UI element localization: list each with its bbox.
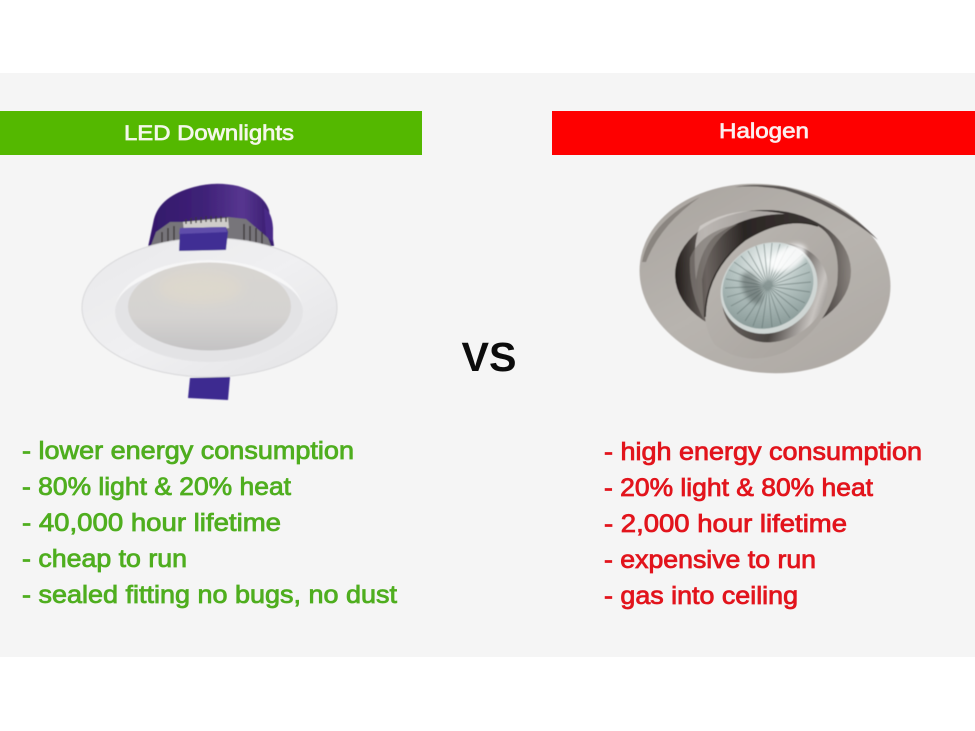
tilted ring bbox=[705, 223, 838, 359]
list: Halogen drawbacks: - 2,000 hour lifetime bbox=[604, 510, 847, 538]
list: LED benefits: - cheap to run bbox=[22, 545, 187, 573]
dark opening bbox=[673, 207, 853, 339]
list: LED benefits: - 40,000 hour lifetime bbox=[22, 509, 281, 537]
lens bbox=[128, 262, 291, 350]
header: LED Downlights: LED Downlights bbox=[124, 122, 294, 145]
list: LED benefits: - 80% light & 20% heat bbox=[22, 473, 291, 501]
clip top bbox=[179, 227, 228, 251]
list: LED benefits: - sealed fitting no bugs, no dust bbox=[22, 581, 397, 609]
header: Halogen: Halogen bbox=[719, 120, 809, 143]
list: Halogen drawbacks: - high energy consumption bbox=[604, 438, 922, 466]
steel flange bbox=[627, 168, 903, 389]
flange bbox=[82, 238, 337, 377]
header: Halogen bbox=[552, 111, 975, 155]
text: VS: VS bbox=[462, 334, 516, 380]
list: Halogen drawbacks: - gas into ceiling bbox=[604, 582, 798, 610]
image: LED downlight fitting bbox=[82, 184, 337, 400]
can body bbox=[148, 184, 274, 247]
list: Halogen drawbacks: - 20% light & 80% heat bbox=[604, 474, 873, 502]
header: LED Downlights bbox=[0, 111, 422, 155]
image: halogen downlight fitting bbox=[627, 168, 903, 389]
background band bbox=[0, 73, 975, 657]
list: LED benefits bbox=[22, 437, 397, 609]
clip bottom bbox=[188, 377, 230, 400]
lamp collar bbox=[703, 224, 847, 362]
reflector bbox=[706, 226, 830, 346]
inner ring bbox=[115, 260, 303, 362]
list: LED benefits: - lower energy consumption bbox=[22, 437, 354, 465]
list: Halogen drawbacks: - expensive to run bbox=[604, 546, 816, 574]
list: Halogen drawbacks bbox=[604, 438, 922, 610]
